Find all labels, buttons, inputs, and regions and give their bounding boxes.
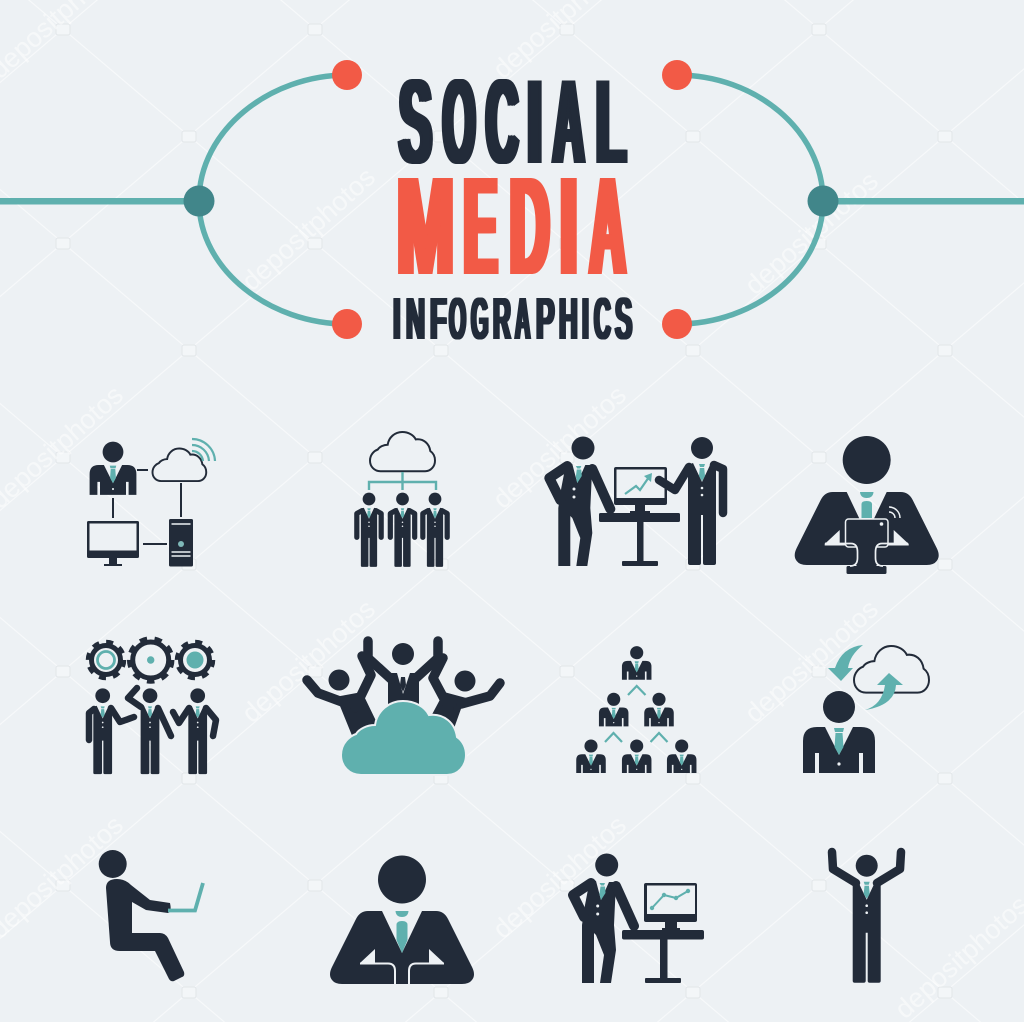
icon: large bust — [330, 856, 474, 984]
title line: SOCIAL: I — [527, 55, 542, 189]
watermark: depositphotos — [739, 594, 884, 728]
title line: INFOGRAPHICS: F — [430, 285, 446, 352]
watermark: depositphotos — [236, 162, 381, 296]
title line: INFOGRAPHICS: S — [615, 285, 632, 352]
watermark: depositphotos — [236, 594, 381, 728]
watermark: depositphotos — [487, 380, 632, 514]
watermark: depositphotos — [739, 166, 884, 300]
title line: MEDIA: I — [560, 148, 578, 304]
title line: INFOGRAPHICS: P — [536, 285, 555, 352]
title line: INFOGRAPHICS: G — [470, 285, 488, 352]
icon: man presenting chart — [573, 854, 704, 983]
icon: three cheering people behind teal cloud — [307, 641, 500, 775]
title line: INFOGRAPHICS: A — [515, 285, 530, 352]
icon: person cloud network — [87, 439, 215, 566]
icon: person with cloud sync — [803, 645, 929, 773]
icon: pyramid organisation — [576, 646, 696, 773]
icon: cloud team hierarchy — [357, 432, 447, 567]
title line: INFOGRAPHICS: R — [493, 285, 511, 352]
title line: INFOGRAPHICS: I — [393, 285, 401, 352]
title — [393, 55, 633, 352]
watermark: depositphotos — [487, 810, 632, 944]
title line: INFOGRAPHICS: I — [582, 285, 588, 352]
title line: SOCIAL: O — [443, 55, 475, 189]
title line: MEDIA: A — [590, 148, 625, 304]
title line: SOCIAL: C — [486, 55, 518, 189]
icon: two businessmen at a monitor — [549, 436, 723, 566]
title line: MEDIA — [397, 148, 628, 304]
title line: INFOGRAPHICS: H — [559, 285, 577, 352]
icon: man with arms raised — [832, 852, 901, 983]
left connector — [0, 60, 362, 339]
title line: MEDIA: D — [510, 148, 549, 304]
title line: SOCIAL: A — [553, 55, 584, 189]
title line: INFOGRAPHICS: O — [449, 285, 466, 352]
title line: INFOGRAPHICS: N — [406, 285, 425, 352]
title line: SOCIAL — [397, 55, 628, 189]
title line: INFOGRAPHICS: C — [594, 285, 611, 352]
icon: person with laptop — [99, 850, 203, 981]
title line: MEDIA: E — [464, 148, 497, 304]
title line: MEDIA: M — [397, 148, 454, 304]
title line: SOCIAL: S — [399, 55, 432, 189]
icon: team with gears — [88, 638, 216, 774]
right connector — [662, 60, 1024, 339]
icon: bust with tablet — [795, 436, 939, 574]
title line: SOCIAL: L — [596, 55, 626, 189]
title line: INFOGRAPHICS — [393, 285, 633, 352]
